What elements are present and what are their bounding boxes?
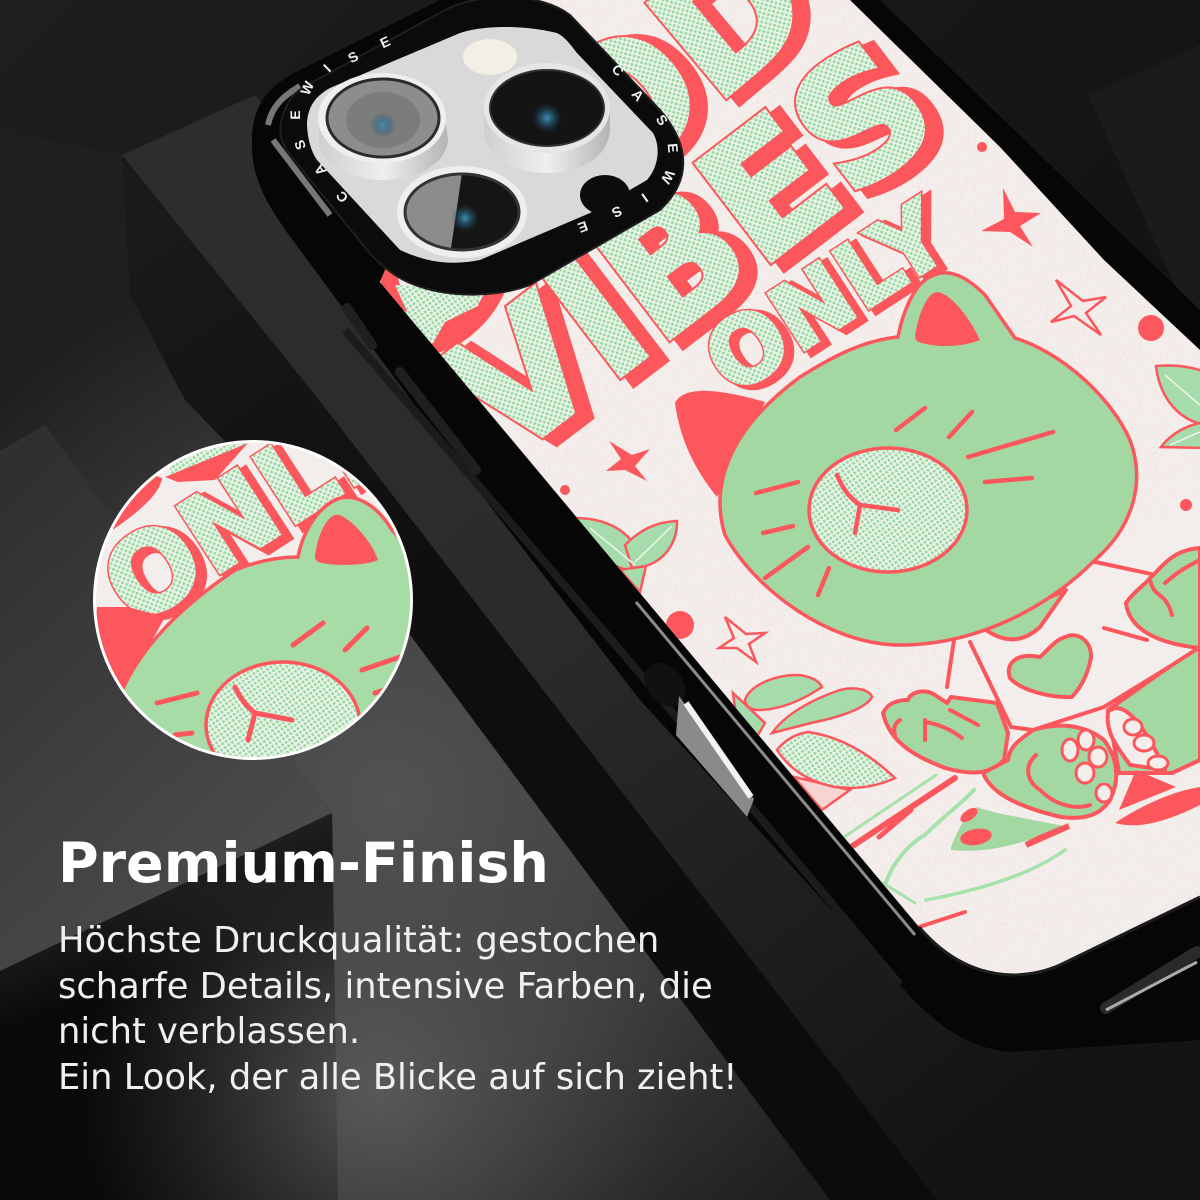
plinth shadow face xyxy=(122,155,937,1200)
camera ring brand text: S xyxy=(291,138,309,152)
right foot xyxy=(1108,708,1165,770)
camera ring brand text: A xyxy=(629,86,647,104)
paw toe lines xyxy=(1150,560,1200,615)
camera ring brand text: S xyxy=(345,48,361,66)
heading: Premium-Finish xyxy=(58,831,549,896)
detail left ear xyxy=(90,607,165,690)
camera glass xyxy=(307,27,658,263)
detail lettering: ONL. xyxy=(81,386,394,650)
camera ring brand text: I xyxy=(320,61,334,75)
detail lettering: ONL. xyxy=(89,389,402,653)
print speckle xyxy=(469,0,1200,971)
cat ear left xyxy=(675,391,765,497)
camera ring brand text: C xyxy=(609,61,627,79)
lidar xyxy=(580,175,630,215)
camera ring brand text: E xyxy=(576,218,590,236)
camera ring brand text: E xyxy=(377,33,393,51)
foot pads xyxy=(1062,730,1112,802)
print paper xyxy=(380,0,1200,974)
detail inner ear xyxy=(315,515,378,565)
left floor surface xyxy=(0,130,830,1200)
stars and dots xyxy=(560,142,1192,639)
charging port xyxy=(1106,952,1197,1010)
side button upper xyxy=(400,372,476,470)
lens two xyxy=(484,63,610,173)
lettering: VIBES: VIBES xyxy=(426,8,983,498)
cat torso xyxy=(947,500,1200,732)
cat head xyxy=(720,273,1137,645)
camera ring brand text: S xyxy=(653,112,671,128)
cat red shadow under feet xyxy=(1115,770,1200,825)
camera ring brand text: I xyxy=(639,190,651,206)
phone xyxy=(252,0,1200,1052)
detail lettering: ONL. xyxy=(81,386,394,650)
right foot pads xyxy=(1124,719,1168,770)
detail letter fragments xyxy=(90,440,248,533)
body text xyxy=(58,920,737,1098)
camera ring brand text: E xyxy=(287,110,303,120)
outlined stars xyxy=(719,280,1106,662)
camera ring brand text: A xyxy=(311,161,329,179)
lens three xyxy=(397,165,527,258)
lettering: GOOD xyxy=(380,0,811,352)
detail muzzle xyxy=(206,662,360,788)
background block top right xyxy=(1088,45,1200,340)
ground blob xyxy=(951,805,1069,851)
phone case body xyxy=(252,0,1200,1052)
detail paper xyxy=(96,443,390,638)
magnified detail circle xyxy=(93,440,413,760)
lettering: VIBES: VIBES xyxy=(412,5,970,495)
body text: scharfe Details, intensive Farben, die xyxy=(58,966,713,1006)
lettering: VIBES: VIBES xyxy=(412,5,970,495)
lettering fragment under camera xyxy=(395,285,479,345)
side switch xyxy=(347,308,372,345)
detail cat head xyxy=(120,497,420,770)
lettering: ONLY: ONLY xyxy=(686,180,968,415)
body text: Höchste Druckqualität: gestochen xyxy=(58,920,659,961)
cat right paw xyxy=(1126,548,1200,648)
print inner bottom edge xyxy=(919,897,1200,975)
cat inner ear xyxy=(915,292,980,346)
case glossy edge xyxy=(345,330,900,985)
cat left paw xyxy=(883,691,1008,773)
leaves left xyxy=(575,518,677,592)
button recess xyxy=(636,655,694,715)
detail mouth and whiskers xyxy=(157,623,400,740)
case bright rim xyxy=(636,602,915,935)
floor light pool xyxy=(0,880,900,1200)
circle border xyxy=(93,440,413,760)
lettering: ONLY: ONLY xyxy=(686,180,968,415)
camera island xyxy=(280,0,683,295)
heart xyxy=(1009,635,1091,697)
lens one xyxy=(318,73,448,180)
camera ring brand text: S xyxy=(609,203,625,221)
case top left translucent band xyxy=(268,86,330,215)
leg line xyxy=(1028,755,1090,807)
camera ring brand text: E xyxy=(665,143,681,153)
lower step shadow xyxy=(0,813,338,1200)
body text: Ein Look, der alle Blicke auf sich zieht! xyxy=(58,1056,737,1098)
leaves lower plant xyxy=(733,675,895,810)
camera ring brand text xyxy=(287,33,681,236)
body text: nicht verblassen. xyxy=(58,1011,360,1052)
camera ring brand text: C xyxy=(333,188,351,206)
cat mouth and whiskers xyxy=(756,408,1053,595)
lettering: ONLY: ONLY xyxy=(693,182,976,418)
chest lines xyxy=(947,560,1169,730)
camera ring brand text: W xyxy=(657,167,678,187)
camera ring brand text: W xyxy=(297,78,317,97)
cat collar xyxy=(986,590,1066,639)
flash xyxy=(463,39,517,75)
cat muzzle xyxy=(809,448,967,572)
cat body and arms xyxy=(883,500,1200,818)
silver side button xyxy=(676,696,754,817)
cat leg and foot xyxy=(983,726,1116,818)
leaves right xyxy=(1156,365,1200,448)
left paw toes xyxy=(894,710,978,740)
cat body right xyxy=(1108,647,1200,773)
print artwork xyxy=(380,0,1200,974)
motion strokes xyxy=(844,775,1065,927)
lower step face xyxy=(0,425,332,971)
